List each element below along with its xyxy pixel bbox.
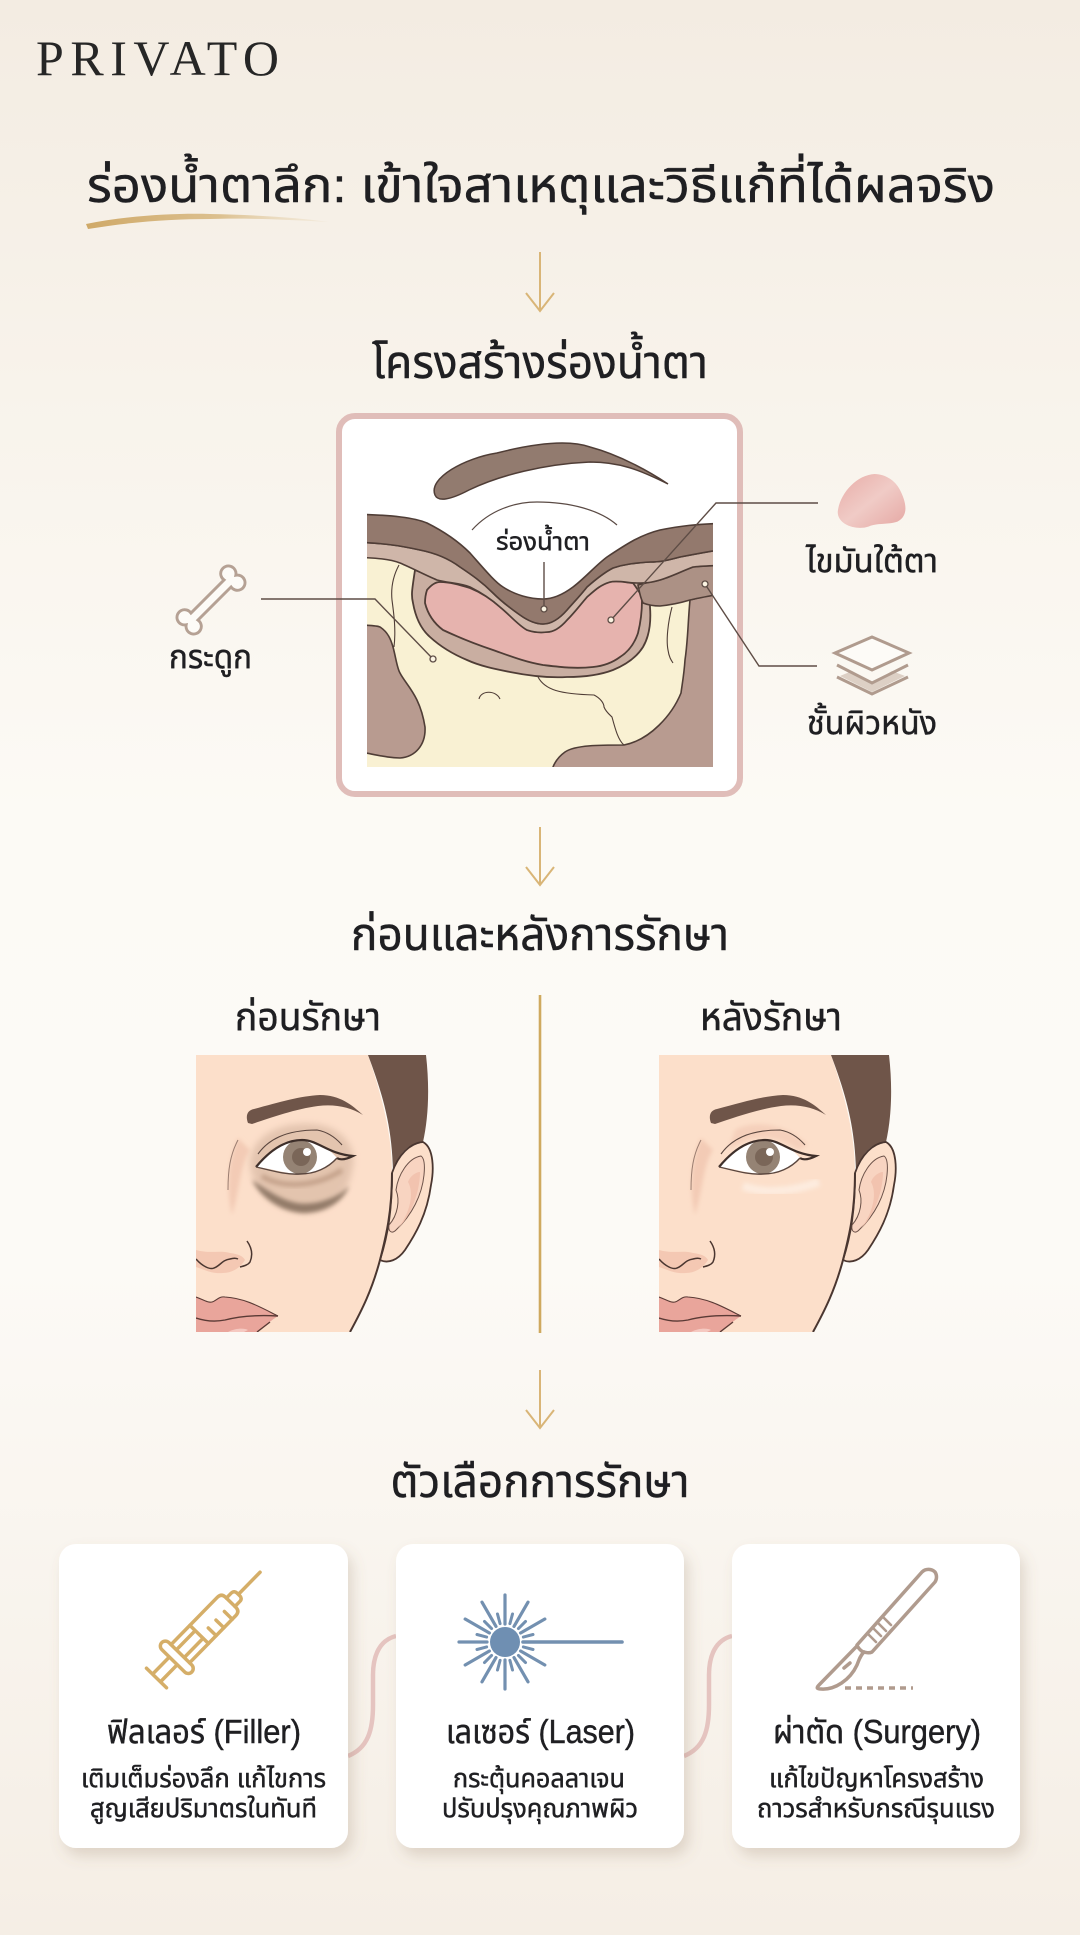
card title: surgery: ผ่าตัด (Surgery) — [773, 1713, 981, 1750]
illustration: face before — [196, 1055, 433, 1332]
divider — [539, 995, 541, 1333]
title — [86, 153, 995, 229]
illustration: arc above trough — [472, 502, 617, 530]
title: ร่องน้ำตาลึก: เข้าใจสาเหตุและวิธีแก้ที่ได้ผลจริง — [87, 153, 995, 215]
card text: laser: ปรับปรุงคุณภาพผิว — [442, 1793, 638, 1824]
panel frame — [339, 416, 740, 794]
connector: laser to surgery — [684, 1636, 732, 1756]
card: laser — [396, 1544, 684, 1848]
card text: surgery — [757, 1763, 995, 1824]
illustration: eyebrow — [434, 443, 668, 499]
icon: scalpel — [817, 1569, 936, 1689]
illustration: face after — [659, 1055, 896, 1332]
card title: filler: ฟิลเลอร์ (Filler) — [107, 1713, 301, 1750]
icon: skin layers — [835, 637, 909, 694]
card text: surgery: ถาวรสำหรับกรณีรุนแรง — [757, 1793, 995, 1824]
icon: bone — [174, 563, 248, 637]
leader dots — [430, 581, 708, 662]
card text: filler: สูญเสียปริมาตรในทันที — [90, 1793, 317, 1824]
card text: surgery: แก้ไขปัญหาโครงสร้าง — [769, 1763, 984, 1793]
label: under-eye fat: ไขมันใต้ตา — [805, 542, 938, 579]
card text: laser — [442, 1763, 638, 1824]
card text: laser: กระตุ้นคอลลาเจน — [453, 1763, 625, 1794]
leader lines — [261, 503, 818, 666]
card title: laser: เลเซอร์ (Laser) — [446, 1713, 635, 1750]
illustration: tear trough cross-section — [367, 514, 713, 767]
label: skin layer: ชั้นผิวหนัง — [807, 702, 937, 741]
label: bone: กระดูก — [169, 638, 252, 677]
heading: before and after: ก่อนและหลังการรักษา — [351, 908, 729, 960]
card text: filler — [81, 1763, 326, 1824]
icon: laser burst — [459, 1595, 622, 1689]
card: surgery — [732, 1544, 1020, 1848]
panel: anatomy diagram — [261, 416, 818, 794]
heading: treatment options: ตัวเลือกการรักษา — [390, 1455, 690, 1507]
logo: PRIVATO: PRIVATO — [36, 30, 279, 86]
arrow: structure to before/after — [526, 827, 554, 885]
label: after: หลังรักษา — [700, 997, 842, 1039]
arrow: title to structure — [526, 252, 554, 311]
card text: filler: เติมเต็มร่องลึก แก้ไขการ — [81, 1763, 326, 1793]
title underline brush — [86, 214, 329, 229]
arrow: before/after to treatments — [526, 1370, 554, 1428]
icon: syringe — [141, 1558, 275, 1693]
label: tear trough: ร่องน้ำตา — [496, 524, 590, 556]
icon: fat blob — [838, 474, 905, 528]
label: before: ก่อนรักษา — [235, 997, 381, 1039]
connector: filler to laser — [348, 1636, 396, 1756]
card: filler — [59, 1544, 348, 1848]
heading: structure: โครงสร้างร่องน้ำตา — [372, 331, 708, 388]
